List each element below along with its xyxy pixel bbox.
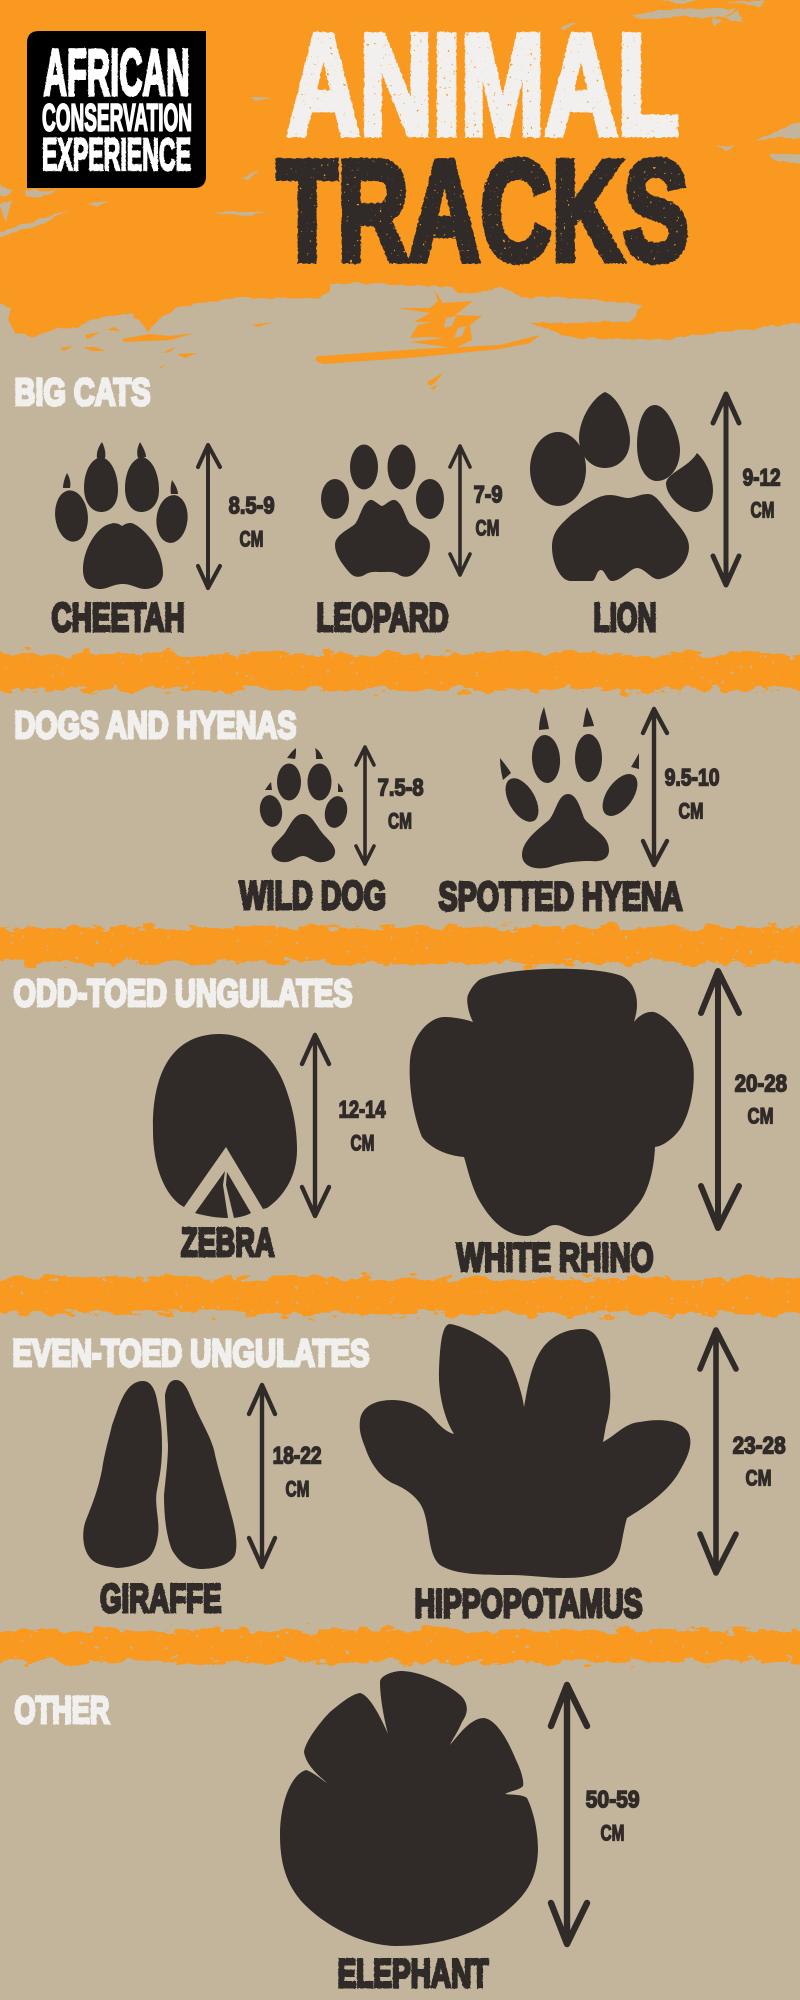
cheetah paw (53, 442, 190, 589)
leopard size: 7-9 (474, 481, 503, 508)
logo: African Conservation Experience: EXPERIENCE (42, 129, 191, 180)
track: hippopotamus (360, 1324, 786, 1626)
heading: Even-toed ungulates: EVEN-TOED UNGULATES (12, 1333, 370, 1375)
zebra name: ZEBRA (181, 1221, 274, 1265)
wild dog size: 7.5-8 (378, 774, 424, 801)
track: cheetah (52, 442, 275, 640)
lion size arrow (713, 394, 739, 585)
cheetah name: CHEETAH (52, 596, 184, 640)
cheetah size arrow (198, 445, 220, 588)
spotted hyena size arrow (643, 709, 667, 865)
logo: African Conservation Experience: AFRICAN (44, 36, 190, 109)
track: wild dog (240, 747, 424, 918)
wild dog name: WILD DOG (240, 874, 386, 918)
elephant size: 50-59 (586, 1786, 640, 1813)
hippopotamus size: 23-28 (733, 1432, 786, 1459)
giraffe unit: CM (286, 1476, 310, 1502)
small brush marks (60, 309, 443, 390)
heading: Odd-toed ungulates: ODD-TOED UNGULATES (14, 973, 352, 1015)
track: leopard (316, 444, 503, 640)
header orange brush area (0, 0, 800, 390)
white rhino unit: CM (748, 1104, 774, 1128)
lion unit: CM (750, 498, 774, 522)
elephant unit: CM (600, 1820, 624, 1846)
zebra unit: CM (350, 1130, 374, 1156)
cheetah size: 8.5-9 (229, 492, 275, 519)
wild dog size arrow (356, 747, 374, 864)
white rhino size: 20-28 (735, 1070, 787, 1097)
divider band 2 (0, 927, 800, 963)
wild dog unit: CM (388, 808, 412, 834)
elephant name: ELEPHANT (338, 1952, 488, 1996)
track: spotted hyena (438, 707, 720, 919)
giraffe size: 18-22 (273, 1442, 322, 1469)
white rhino name: WHITE RHINO (456, 1236, 654, 1280)
elephant foot (280, 1671, 538, 1946)
leopard paw (321, 444, 444, 577)
zebra size arrow (302, 1035, 329, 1216)
splash gaps (444, 316, 466, 338)
track: elephant (280, 1671, 640, 1996)
giraffe size arrow (249, 1385, 275, 1567)
track: white rhino (410, 969, 787, 1280)
lion size: 9-12 (743, 464, 781, 491)
elephant size arrow (551, 1685, 587, 1944)
track: lion (530, 392, 781, 640)
giraffe hoof (83, 1380, 236, 1569)
wild dog paw (257, 748, 350, 862)
leopard size arrow (450, 446, 470, 575)
heading: Dogs and Hyenas: DOGS AND HYENAS (14, 705, 296, 747)
zebra hoof (153, 1034, 297, 1218)
lion name: LION (594, 596, 656, 640)
white rhino size arrow (701, 971, 739, 1228)
hippopotamus name: HIPPOPOTAMUS (414, 1582, 642, 1626)
lion paw (530, 392, 713, 581)
zebra size: 12-14 (339, 1096, 386, 1123)
heading: Other: OTHER (14, 1690, 110, 1732)
giraffe name: GIRAFFE (100, 1577, 222, 1621)
spotted hyena name: SPOTTED HYENA (438, 875, 682, 919)
spotted hyena size: 9.5-10 (665, 764, 720, 791)
divider band 4 (0, 1630, 800, 1662)
hippopotamus size arrow (700, 1330, 736, 1573)
logo: African Conservation Experience (27, 31, 206, 188)
leopard unit: CM (476, 516, 500, 540)
hippopotamus foot (360, 1324, 690, 1578)
spotted hyena paw (499, 707, 644, 868)
divider band 3 (0, 1278, 800, 1314)
brush streak (316, 335, 540, 364)
spotted hyena unit: CM (678, 798, 704, 824)
leopard name: LEOPARD (316, 596, 448, 640)
track: giraffe (83, 1380, 322, 1621)
track: zebra (153, 1034, 386, 1265)
hippopotamus unit: CM (746, 1466, 772, 1490)
divider band 1 (0, 654, 800, 690)
brush splash (397, 290, 482, 348)
cheetah unit: CM (240, 526, 264, 552)
white rhino foot (410, 969, 694, 1236)
heading: Big Cats: BIG CATS (14, 372, 150, 414)
logo: African Conservation Experience: CONSERVATION (42, 98, 192, 140)
